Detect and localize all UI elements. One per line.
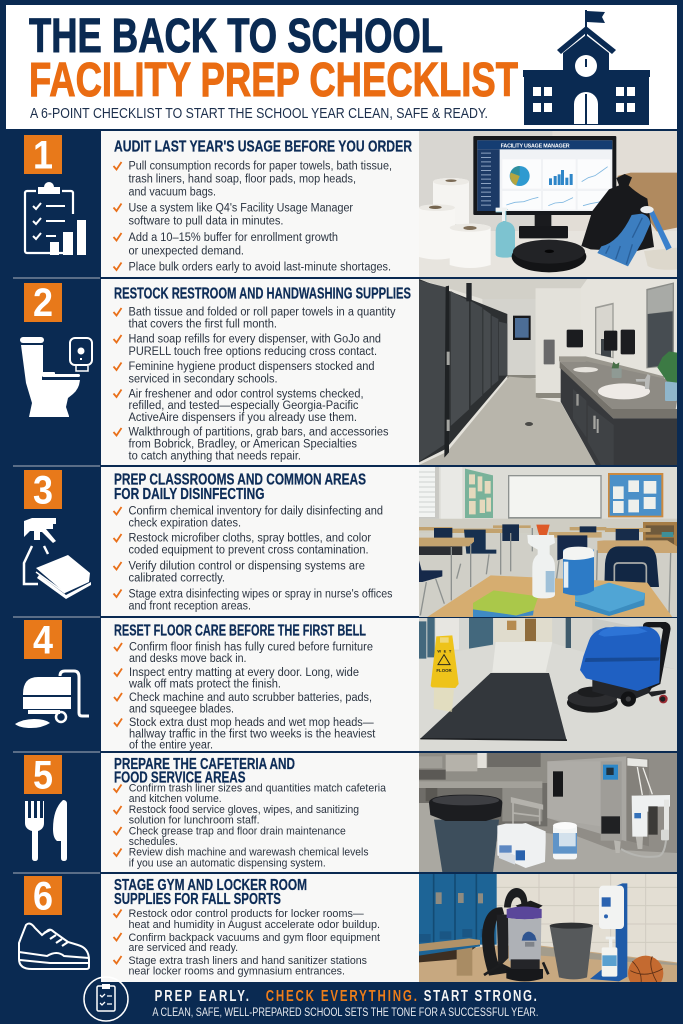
step 4 number: 4 bbox=[33, 618, 54, 662]
step 5 card bbox=[101, 753, 419, 872]
step 2 checklist: refilled, and tested—especially Georgia-Pacific bbox=[128, 400, 359, 412]
step 6 heading: SUPPLIES FOR FALL SPORTS bbox=[114, 891, 281, 908]
step 1 number: 1 bbox=[33, 134, 53, 178]
step 6 number bbox=[24, 874, 62, 918]
panel: step 4 bbox=[15, 618, 677, 752]
photo: hallway floor and auto scrubber: FLOOR bbox=[436, 668, 453, 673]
step 1 number bbox=[24, 134, 62, 178]
panel: step 2 bbox=[20, 279, 677, 465]
step 6 checklist: Confirm backpack vacuums and gym floor equipment bbox=[128, 932, 380, 944]
photo: usage manager monitor and supplies bbox=[419, 131, 677, 277]
step 3 heading bbox=[114, 472, 366, 503]
step 5 checklist: Check grease trap and floor drain maintenance bbox=[129, 825, 346, 837]
step 6 checklist bbox=[114, 908, 380, 978]
photo: hallway floor and auto scrubber bbox=[419, 618, 677, 751]
header panel bbox=[6, 5, 677, 129]
footer tagline: PREP EARLY. bbox=[155, 986, 249, 1004]
step 3 card bbox=[101, 467, 419, 616]
step 2 checklist: Air freshener and odor control systems checked, bbox=[128, 388, 364, 400]
step 3 heading: PREP CLASSROOMS AND COMMON AREAS bbox=[114, 472, 366, 488]
photo: classroom bbox=[419, 467, 677, 617]
step 3 checklist bbox=[114, 506, 393, 612]
step 5 number: 5 bbox=[33, 754, 53, 798]
step 4 checklist bbox=[114, 642, 376, 752]
photo: cafeteria kitchen bbox=[419, 753, 677, 872]
step 1 checklist: or unexpected demand. bbox=[128, 245, 244, 257]
icon: school building bbox=[523, 10, 650, 125]
step 5 checklist: if you use an automatic dispensing system. bbox=[129, 857, 326, 869]
photo: locker room supplies bbox=[419, 874, 677, 982]
step 3 number bbox=[24, 468, 62, 512]
step 2 checklist: to catch anything that needs repair. bbox=[128, 451, 301, 463]
footer subline: A CLEAN, SAFE, WELL-PREPARED SCHOOL SETS THE TONE FOR A SUCCESSFUL YEAR. bbox=[152, 1007, 538, 1019]
photo: hallway floor and auto scrubber: WET bbox=[437, 649, 452, 654]
step 4 checklist: Confirm floor finish has fully cured before furniture bbox=[129, 642, 373, 654]
step 1 checklist: software to pull data in minutes. bbox=[128, 216, 284, 228]
icon: clipboard with bars bbox=[25, 182, 86, 255]
step 3 number: 3 bbox=[33, 468, 53, 512]
step 1 checklist: Add a 10–15% buffer for enrollment growth bbox=[128, 232, 338, 244]
step 4 checklist: walk off mats protect the finish. bbox=[128, 678, 281, 690]
step 4 checklist: of the entire year. bbox=[129, 740, 213, 752]
step 5 checklist: Review dish machine and warewash chemical levels bbox=[129, 847, 369, 859]
step 3 heading: FOR DAILY DISINFECTING bbox=[114, 486, 264, 503]
step 6 heading bbox=[114, 877, 307, 908]
footer tagline: CHECK EVERYTHING. bbox=[266, 986, 417, 1004]
footer band bbox=[84, 977, 538, 1021]
step 2 checklist: Hand soap refills for every dispenser, with GoJo and bbox=[128, 334, 381, 346]
step 1 checklist: Use a system like Q4's Facility Usage Manager bbox=[128, 203, 353, 215]
title line 1: THE BACK TO SCHOOL bbox=[29, 10, 443, 63]
step 2 checklist: PURELL touch free options reducing cross contact. bbox=[128, 346, 377, 358]
step 5 number bbox=[24, 754, 62, 798]
step 2 checklist: serviced in secondary schools. bbox=[128, 373, 278, 385]
step 6 heading: STAGE GYM AND LOCKER ROOM bbox=[114, 877, 307, 894]
step 6 checklist: Stage extra trash liners and hand sanitizer stations bbox=[128, 955, 367, 967]
icon: sneaker bbox=[19, 924, 89, 969]
step 2 checklist: Bath tissue and folded or roll paper towels in a quantity bbox=[128, 307, 396, 319]
step 5 checklist: Restock food service gloves, wipes, and sanitizing bbox=[129, 804, 359, 816]
step 3 checklist: Confirm chemical inventory for daily disinfecting and bbox=[128, 506, 383, 518]
panel: step 3 bbox=[24, 467, 677, 617]
icon: spray bottle and cloths bbox=[24, 518, 91, 599]
step 2 number: 2 bbox=[33, 281, 53, 325]
step 2 checklist: Feminine hygiene product dispensers stocked and bbox=[128, 361, 374, 373]
step 2 checklist: from Bobrick, Bradley, or American Specialties bbox=[128, 439, 357, 451]
step 2 card bbox=[101, 279, 419, 465]
icon: circled clipboard bbox=[84, 977, 128, 1021]
step 5 checklist: schedules. bbox=[129, 836, 178, 848]
icon: floor scrubber bbox=[15, 671, 89, 728]
step 4 checklist: hallway traffic in the first two weeks is the heaviest bbox=[129, 728, 376, 740]
step 6 checklist: are serviced and ready. bbox=[128, 942, 238, 954]
step 4 checklist: and desks move back in. bbox=[129, 653, 246, 665]
step 4 heading: RESET FLOOR CARE BEFORE THE FIRST BELL bbox=[114, 622, 366, 639]
panel: step 5 bbox=[24, 753, 677, 872]
footer tagline: START STRONG. bbox=[424, 986, 537, 1004]
step 2 checklist: that covers the first full month. bbox=[128, 319, 277, 331]
subtitle: A 6-POINT CHECKLIST TO START THE SCHOOL YEAR CLEAN, SAFE & READY. bbox=[30, 106, 488, 122]
photo: restroom bbox=[419, 279, 677, 465]
step 1 heading: AUDIT LAST YEAR'S USAGE BEFORE YOU ORDER bbox=[114, 138, 412, 156]
panel: step 6 bbox=[19, 874, 677, 991]
step 6 checklist: near locker rooms and gymnasium entrances. bbox=[128, 966, 345, 978]
photo: usage manager monitor and supplies: FACILITY USAGE MANAGER bbox=[501, 143, 570, 149]
left column row dividers bbox=[13, 277, 100, 874]
step 1 checklist bbox=[114, 161, 392, 274]
step 4 card bbox=[101, 618, 419, 751]
step 3 checklist: Verify dilution control or dispensing systems are bbox=[128, 561, 365, 573]
step 5 checklist: Confirm trash liner sizes and quantities match cafeteria bbox=[129, 783, 387, 795]
step 1 checklist: Place bulk orders early to avoid last-minute shortages. bbox=[128, 262, 391, 274]
step 4 checklist: and squeegee blades. bbox=[129, 703, 234, 715]
step 3 checklist: calibrated correctly. bbox=[128, 573, 225, 585]
step 4 checklist: Inspect entry matting at every door. Long, wide bbox=[129, 667, 359, 679]
step 5 heading: PREPARE THE CAFETERIA AND bbox=[114, 756, 295, 773]
step 6 checklist: heat and humidity in August accelerate odor buildup. bbox=[128, 919, 380, 931]
icon: fork and knife bbox=[25, 800, 67, 861]
step 2 checklist bbox=[114, 307, 396, 463]
footer tagline bbox=[155, 986, 537, 1004]
step 1 checklist: trash liners, hand soap, floor pads, mop heads, bbox=[128, 174, 356, 186]
step 6 number: 6 bbox=[33, 874, 53, 918]
step 5 checklist bbox=[114, 783, 387, 869]
step 5 heading bbox=[114, 756, 295, 787]
step 1 checklist: Pull consumption records for paper towels, bath tissue, bbox=[128, 161, 392, 173]
step 3 checklist: check expiration dates. bbox=[128, 518, 241, 530]
step 5 heading: FOOD SERVICE AREAS bbox=[114, 770, 246, 787]
step 6 card bbox=[101, 874, 419, 982]
step 2 number bbox=[24, 281, 62, 325]
step 3 checklist: coded equipment to prevent cross contamination. bbox=[128, 545, 368, 557]
step 5 checklist: solution for lunchroom staff. bbox=[129, 814, 260, 826]
step 2 checklist: ActiveAire dispensers if you already use them. bbox=[128, 412, 357, 424]
step 3 checklist: and front reception areas. bbox=[128, 600, 251, 612]
step 4 number bbox=[24, 618, 62, 662]
step 1 card bbox=[101, 131, 419, 277]
step 2 checklist: Walkthrough of partitions, grab bars, and accessories bbox=[128, 427, 389, 439]
step 3 checklist: Restock microfiber cloths, spray bottles, and color bbox=[128, 533, 371, 545]
icon: toilet and dispenser bbox=[20, 337, 92, 417]
step 4 checklist: Check machine and auto scrubber batteries, pads, bbox=[129, 692, 372, 704]
step 6 checklist: Restock odor control products for locker rooms— bbox=[128, 908, 364, 920]
title line 2: FACILITY PREP CHECKLIST bbox=[29, 54, 518, 107]
step 2 heading: RESTOCK RESTROOM AND HANDWASHING SUPPLIES bbox=[114, 286, 411, 302]
step 3 checklist: Stage extra disinfecting wipes or spray in nurse's offices bbox=[128, 588, 393, 600]
step 1 checklist: and vacuum bags. bbox=[128, 186, 216, 198]
step 5 checklist: and kitchen volume. bbox=[129, 793, 222, 805]
panel: step 1 bbox=[24, 131, 677, 277]
step 4 checklist: Stock extra dust mop heads and wet mop heads— bbox=[129, 717, 374, 729]
